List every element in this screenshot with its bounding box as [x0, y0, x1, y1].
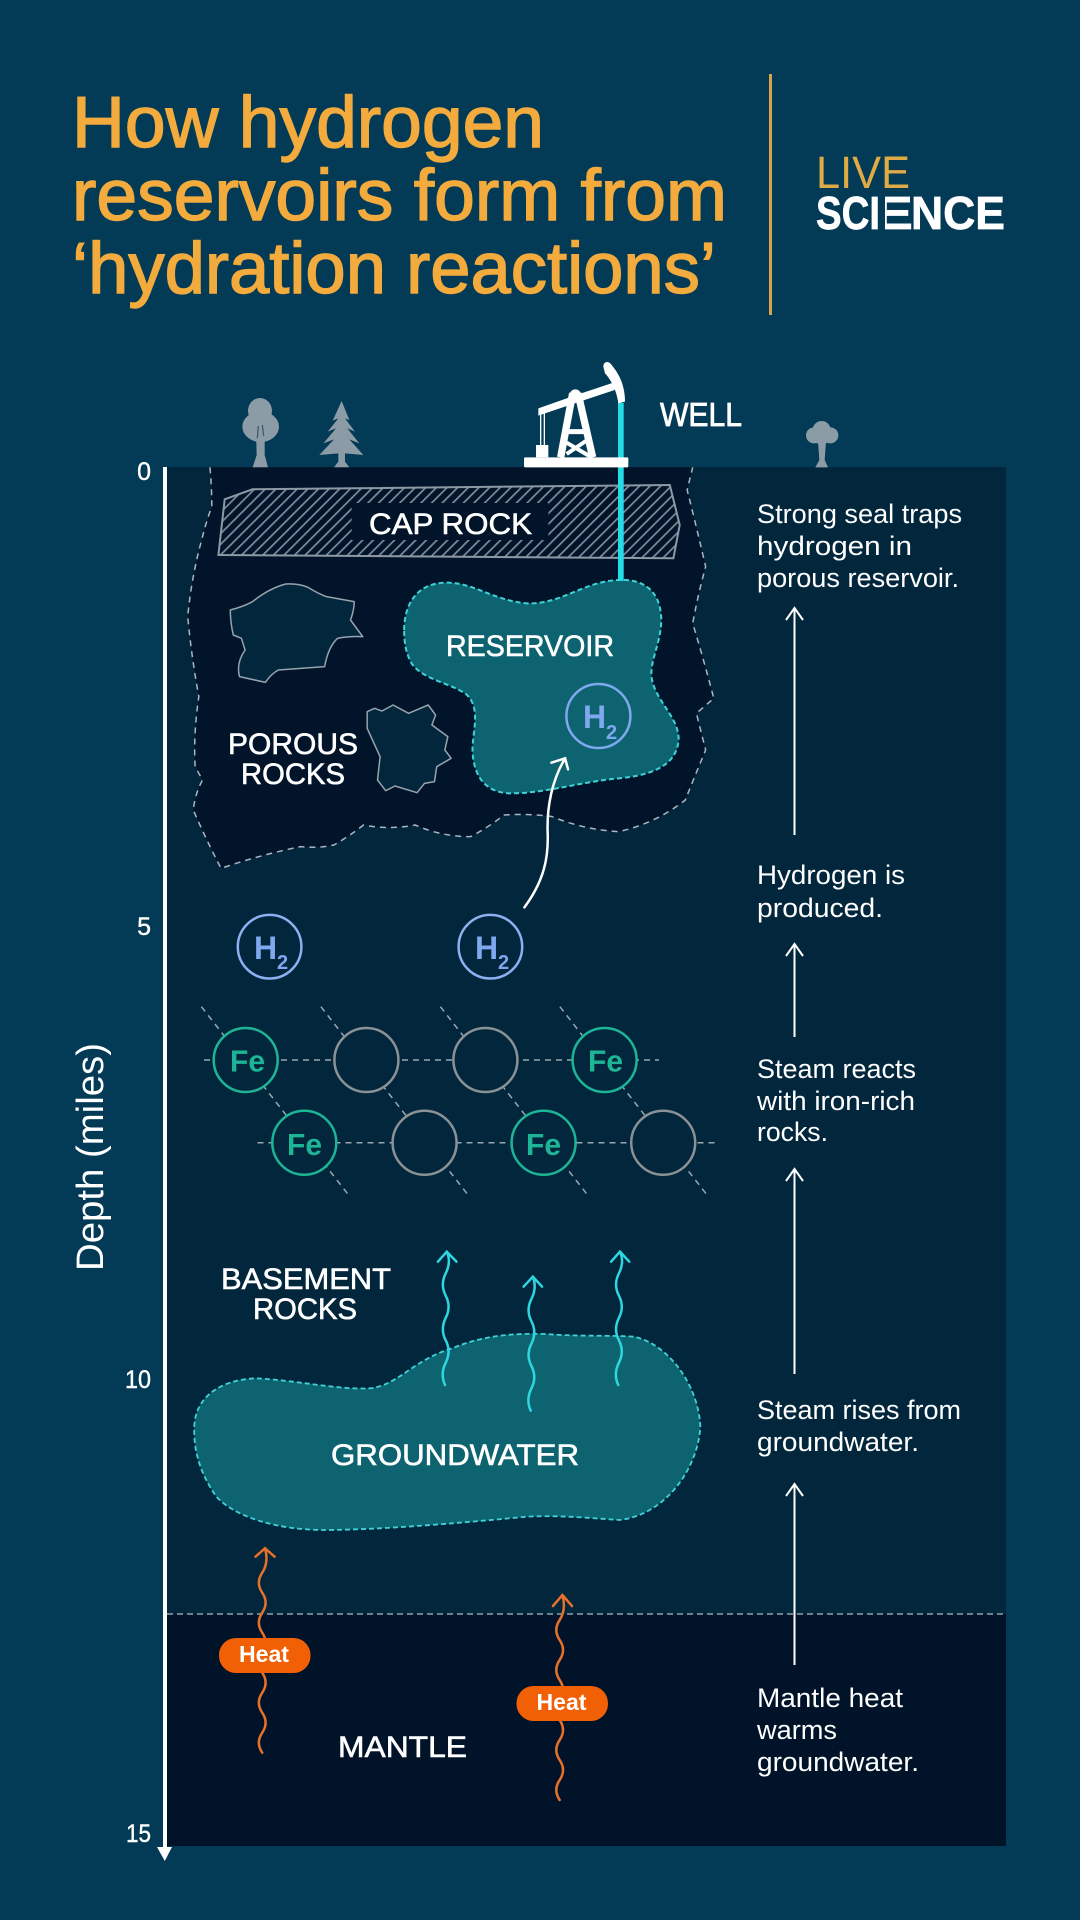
- label: groundwater: GROUNDWATER: [331, 1439, 579, 1472]
- logo: Live Science: E: [874, 187, 913, 239]
- icon: small tree: [806, 421, 838, 467]
- note: steam reacts: with iron-rich: [756, 1086, 915, 1116]
- H2 molecule right: [459, 915, 522, 978]
- heat arrow right: Heat: [536, 1689, 587, 1715]
- title: reservoirs form from: [72, 156, 727, 236]
- lattice of iron-rich rock: Fe: [588, 1044, 623, 1079]
- label: mantle: MANTLE: [338, 1731, 467, 1764]
- note: strong seal: porous reservoir.: [757, 563, 959, 593]
- label: porous rocks: [228, 728, 358, 791]
- label: basement rocks: BASEMENT: [221, 1263, 391, 1296]
- heat arrow left: Heat: [239, 1641, 289, 1667]
- depth axis: 10: [125, 1366, 151, 1394]
- logo: Live Science: SCI: [816, 187, 880, 239]
- cap rock: [218, 485, 680, 558]
- logo: Live Science: LIVE: [816, 147, 910, 198]
- arrow: step up to hydrogen: [786, 944, 803, 1037]
- porous rock outline 2: [367, 705, 451, 793]
- note: strong seal: Strong seal traps: [757, 499, 962, 529]
- well pipe: [618, 403, 624, 581]
- depth axis: 5: [137, 913, 151, 941]
- panel: underground cross-section: [167, 467, 1006, 1846]
- lattice of iron-rich rock: Fe: [230, 1044, 265, 1079]
- note: steam reacts: [756, 1054, 916, 1147]
- lattice of iron-rich rock: [201, 1007, 715, 1195]
- lattice of iron-rich rock: Fe: [287, 1127, 322, 1162]
- note: mantle heat: [756, 1683, 919, 1777]
- H2 molecule left: [238, 915, 301, 978]
- reservoir: [404, 580, 679, 793]
- arrow: step up to seal: [786, 608, 803, 835]
- logo: Live Science: NCE: [911, 187, 1005, 239]
- label: basement rocks: [221, 1263, 391, 1326]
- note: mantle heat: groundwater.: [757, 1747, 919, 1777]
- note: mantle heat: warms: [756, 1715, 837, 1745]
- groundwater: [194, 1334, 700, 1530]
- note: steam reacts: Steam reacts: [757, 1054, 916, 1084]
- depth axis: 15: [126, 1820, 151, 1848]
- note: steam reacts: rocks.: [757, 1117, 828, 1147]
- note: steam rises: [757, 1395, 961, 1457]
- H2 molecule left: 2: [277, 952, 288, 974]
- porous rock outline 1: [230, 584, 363, 682]
- note: hydrogen produced: Hydrogen is: [757, 860, 905, 890]
- note: hydrogen produced: produced.: [757, 893, 883, 923]
- note: steam rises: groundwater.: [757, 1427, 919, 1457]
- note: strong seal: [757, 499, 962, 593]
- porous rock region: [188, 467, 714, 868]
- label: porous rocks: ROCKS: [241, 758, 345, 791]
- note: strong seal: hydrogen in: [757, 531, 912, 561]
- cap rock: CAP ROCK: [369, 508, 532, 541]
- H2 molecule left: H: [254, 930, 277, 966]
- note: steam rises: Steam rises from: [757, 1395, 961, 1425]
- note: hydrogen produced: [757, 860, 905, 923]
- steam arrows: [438, 1252, 629, 1411]
- label: porous rocks: POROUS: [228, 728, 358, 761]
- title: ‘hydration reactions’: [72, 229, 716, 309]
- depth axis: Depth (miles): [70, 1043, 112, 1271]
- arrow: step up to reaction: [786, 1169, 803, 1374]
- depth axis: [70, 458, 172, 1861]
- H2 in reservoir: 2: [606, 722, 617, 744]
- heat arrow right: [516, 1595, 608, 1800]
- label: reservoir: RESERVOIR: [446, 630, 614, 663]
- heat arrow left: [219, 1548, 310, 1753]
- title: [72, 83, 727, 309]
- icon: pump jack: [524, 362, 628, 467]
- label: basement rocks: ROCKS: [253, 1293, 357, 1326]
- note: mantle heat: Mantle heat: [757, 1683, 904, 1713]
- H2 molecule right: H: [475, 930, 498, 966]
- label: well: WELL: [660, 396, 742, 433]
- icon: rounded tree: [242, 398, 279, 467]
- depth axis: 0: [137, 458, 151, 486]
- arrow: step up to steam: [786, 1484, 803, 1665]
- icon: pine tree: [319, 401, 363, 467]
- arrow: hydrogen rising into reservoir: [524, 758, 568, 907]
- H2 in reservoir: H: [583, 699, 606, 735]
- title: How hydrogen: [72, 83, 544, 163]
- logo: Live Science: [816, 147, 1005, 239]
- lattice of iron-rich rock: Fe: [526, 1127, 561, 1162]
- H2 in reservoir: [566, 684, 630, 748]
- H2 molecule right: 2: [498, 952, 509, 974]
